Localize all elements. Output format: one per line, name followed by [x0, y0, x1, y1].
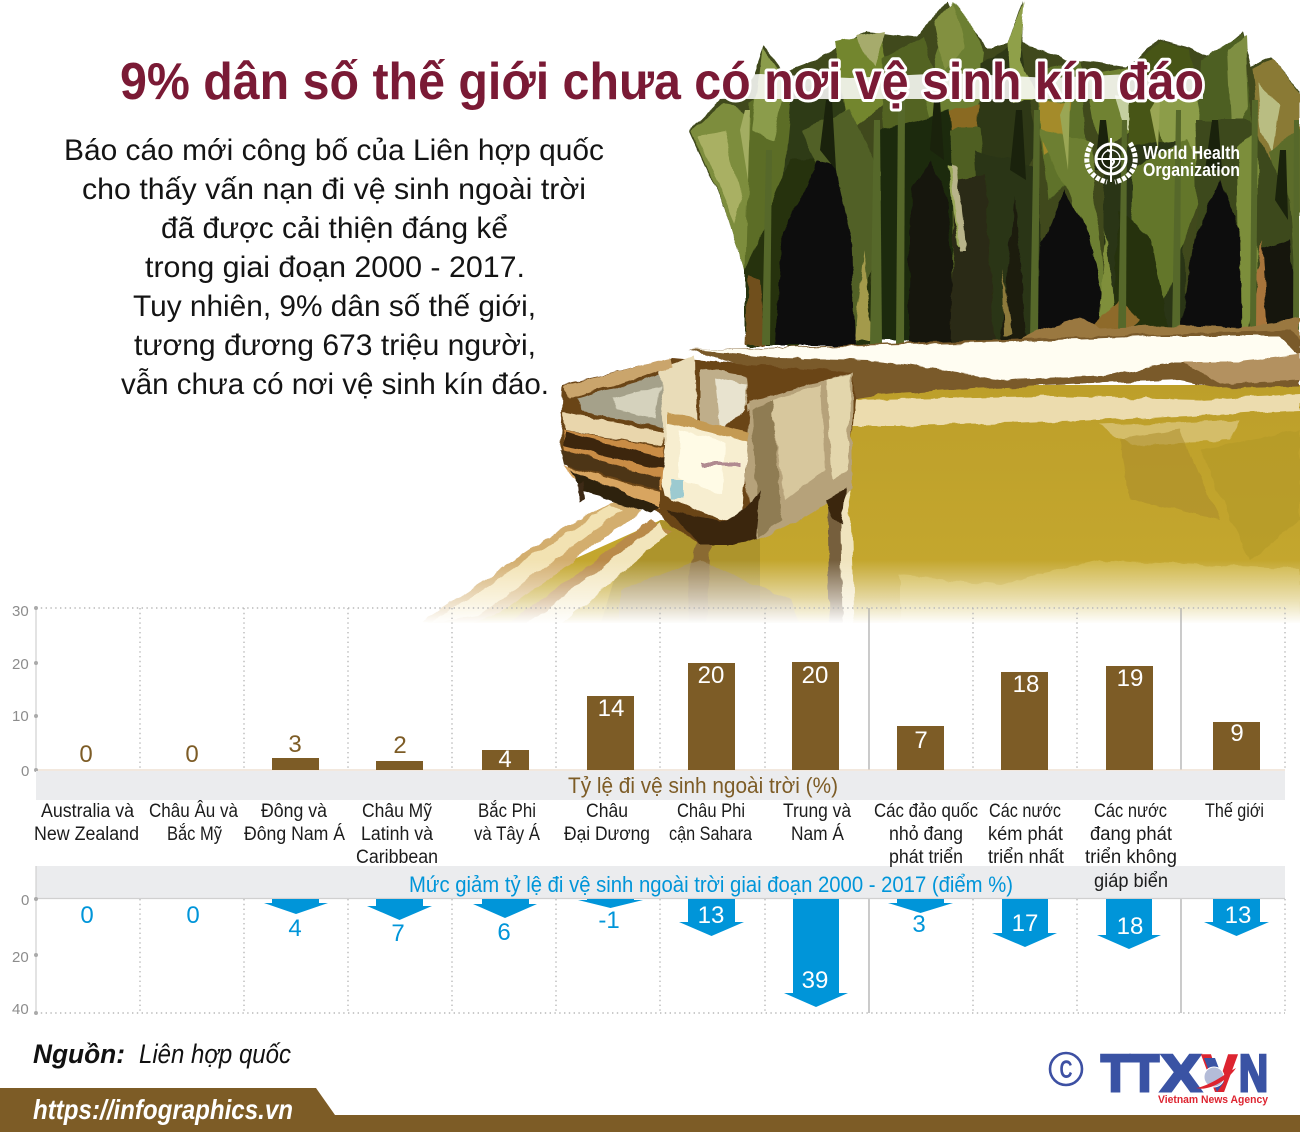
logo: TTXVN: N [1239, 1045, 1268, 1103]
logo: TTXVN: X [1161, 1045, 1201, 1103]
pond water [425, 385, 1300, 626]
wooden planks walkway [422, 490, 854, 626]
intro text block: đã được cải thiện đáng kể [161, 212, 508, 245]
band: reduction heading [36, 866, 1285, 898]
arrow values: 13 [1225, 902, 1251, 929]
reeds background [690, 0, 1300, 345]
logo: TTXVN: C [1060, 1056, 1072, 1084]
arrow values: 0 [186, 902, 200, 929]
bar values: 3 [288, 731, 302, 758]
region labels: New Zealand [34, 824, 139, 845]
bar values: 2 [393, 732, 407, 759]
logo: TTXVN: V [1202, 1045, 1237, 1103]
y axis labels: 20 [12, 656, 29, 673]
y axis labels: 20 [12, 949, 29, 966]
intro text block: Tuy nhiên, 9% dân số thế giới, [133, 290, 536, 323]
arrows [264, 899, 1269, 1007]
arrow values: 3 [912, 911, 926, 938]
region labels: Các nước [989, 801, 1061, 822]
bar values: 0 [79, 741, 93, 768]
arrow values: 7 [391, 920, 405, 947]
region labels: cận Sahara [669, 824, 752, 845]
logo: TTXVN: Vietnam News Agency [1158, 1094, 1269, 1106]
intro text block: Báo cáo mới công bố của Liên hợp quốc [64, 134, 604, 167]
arrow values: 18 [1117, 913, 1143, 940]
bar values: 20 [698, 662, 724, 689]
region labels: Bắc Mỹ [167, 823, 222, 845]
region labels: Đông và [261, 801, 327, 822]
logo: TTXVN [1050, 1045, 1269, 1106]
region labels: Châu Mỹ [362, 801, 432, 822]
footer bar with URL [0, 1088, 1300, 1132]
arrow values: 6 [497, 919, 511, 946]
y axis labels [12, 603, 38, 780]
region labels: Châu Âu và [149, 800, 238, 822]
y axis labels: 40 [12, 1001, 29, 1018]
bar values [79, 662, 1244, 773]
reeds dark trunks [745, 160, 1298, 345]
logo: World Health Organization: World Health [1143, 143, 1240, 163]
arrow values: -1 [598, 907, 620, 934]
region labels: triển nhất [988, 847, 1065, 868]
y axis labels: 0 [21, 763, 29, 780]
region labels: và Tây Á [474, 824, 540, 845]
band: open defecation rate heading [36, 771, 1285, 800]
region labels: Trung và [783, 801, 851, 822]
region labels: Latinh và [361, 824, 433, 845]
arrow values: 4 [288, 915, 302, 942]
white band behind title [690, 73, 1203, 99]
y axis labels: 10 [12, 708, 29, 725]
region labels: Nam Á [791, 824, 844, 845]
region labels: phát triển [889, 847, 963, 868]
title: 9% dân số thế giới chưa có nơi vệ sinh kín đáo [120, 53, 1204, 111]
thin reed streaks [740, 100, 1299, 345]
source note [33, 1039, 291, 1069]
region labels: Thế giới [1205, 801, 1264, 822]
band: reduction heading: Mức giảm tỷ lệ đi vệ sinh ngoài trời giai đoạn 2000 - 2017 (điểm %) [409, 872, 1013, 897]
bar values: 4 [498, 746, 512, 773]
bottom fade of the illustration [400, 560, 1300, 643]
arrow values: 0 [80, 902, 94, 929]
bar values: 9 [1230, 720, 1244, 747]
bar values: 20 [802, 662, 828, 689]
arrow values [80, 902, 1251, 994]
region labels: Châu Phi [677, 801, 745, 822]
intro text block [64, 134, 604, 401]
arrow values: 39 [802, 967, 828, 994]
illustration: open latrine over a pond with reeds [400, 0, 1300, 643]
intro text block: tương đương 673 triệu người, [134, 329, 536, 362]
region labels [34, 800, 1264, 892]
far bank [690, 330, 1300, 626]
bar values: 0 [185, 741, 199, 768]
source note: Liên hợp quốc [139, 1039, 291, 1069]
bars [272, 662, 1260, 770]
chart: reduction 2000-2017 (percentage points) [12, 866, 1285, 1018]
intro text block: vẫn chưa có nơi vệ sinh kín đáo. [121, 368, 549, 401]
logo: TTXVN: TT [1101, 1045, 1159, 1103]
bar values: 14 [598, 695, 624, 722]
source note: Nguồn: [33, 1039, 125, 1069]
icon: WHO emblem [1087, 138, 1135, 182]
region labels: đang phát [1090, 824, 1173, 845]
icon: copyright [1050, 1053, 1082, 1085]
arrow values: 13 [698, 902, 724, 929]
band: open defecation rate heading: Tỷ lệ đi vệ sinh ngoài trời (%) [568, 773, 838, 798]
region labels: giáp biển [1094, 871, 1168, 892]
logo: World Health Organization [1087, 138, 1240, 182]
region labels: triển không [1085, 847, 1177, 868]
region labels: Đại Dương [564, 824, 650, 845]
region labels: Bắc Phi [478, 800, 536, 822]
intro text block: trong giai đoạn 2000 - 2017. [145, 251, 525, 284]
latrine hut [560, 356, 855, 545]
footer bar with URL: https://infographics.vn [33, 1094, 293, 1125]
chart: open defecation rate (%) [12, 603, 1285, 780]
region labels: Australia và [41, 801, 134, 822]
region labels: Đông Nam Á [244, 824, 345, 845]
bar values: 7 [914, 727, 928, 754]
region labels: Các nước [1094, 801, 1167, 822]
y axis labels [12, 892, 38, 1018]
region labels: Các đảo quốc [874, 801, 978, 822]
region labels: Caribbean [356, 847, 438, 868]
y axis labels: 0 [21, 892, 29, 909]
reed base fringe [1010, 318, 1300, 348]
y axis labels: 30 [12, 603, 29, 620]
region labels: kém phát [988, 824, 1064, 845]
bar values: 19 [1117, 665, 1143, 692]
arrow values: 17 [1012, 910, 1038, 937]
bar values: 18 [1013, 671, 1039, 698]
region labels: nhỏ đang [889, 824, 963, 845]
logo: World Health Organization: Organization [1143, 160, 1240, 180]
region labels: Châu [586, 801, 628, 822]
intro text block: cho thấy vấn nạn đi vệ sinh ngoài trời [82, 173, 586, 206]
